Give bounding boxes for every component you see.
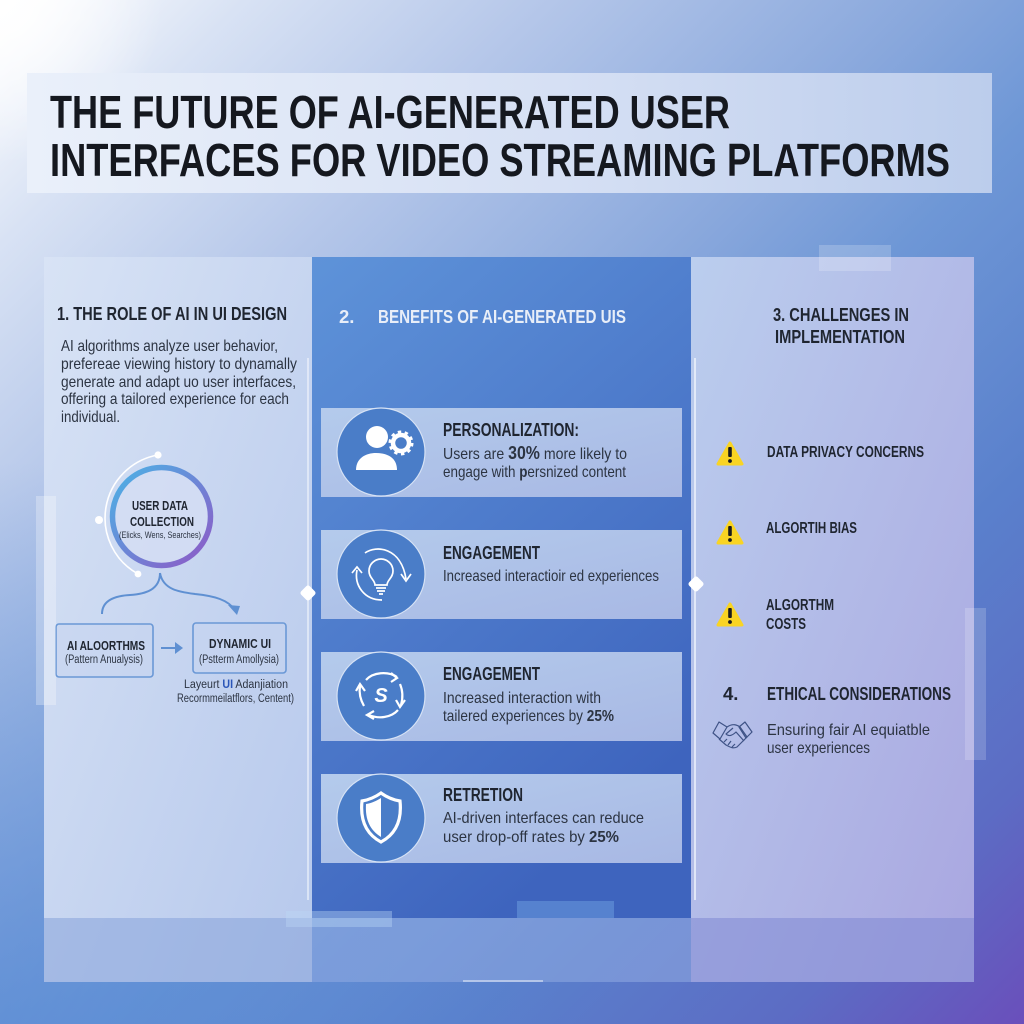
panel: challenges in implementation	[691, 257, 974, 982]
heading: section 2: BENEFITS OF AI-GENERATED UIS	[378, 306, 626, 327]
icon: handshake	[713, 722, 752, 748]
card: personalization: Users are 30% more likely to	[443, 443, 627, 463]
intro text: prefereae viewing history to dynamally	[61, 356, 297, 373]
caption: Recormmeilatflors, Centent)	[177, 693, 294, 705]
node: user data collection: COLLECTION	[130, 514, 194, 529]
heading: section 3: IMPLEMENTATION	[775, 327, 905, 347]
icon: light bulb with arrows	[352, 549, 411, 600]
item: data privacy: DATA PRIVACY CONCERNS	[767, 444, 924, 461]
heading: section 4: ETHICAL CONSIDERATIONS	[767, 683, 951, 704]
item: algorithm bias: ALGORTIH BIAS	[766, 520, 857, 537]
intro text: offering a tailored experience for each	[61, 391, 289, 408]
card: engagement 2: tailered experiences by 25%	[443, 708, 614, 725]
caption	[177, 679, 294, 705]
node: AI algorithms: (Pattern Anualysis)	[65, 654, 143, 666]
item: algorithm costs: COSTS	[766, 616, 806, 633]
card: engagement 1: Increased interactioir ed experiences	[443, 568, 659, 585]
item: algorithm bias	[718, 520, 857, 543]
card: retention: AI-driven interfaces can reduce	[443, 810, 644, 827]
node: dynamic UI	[193, 623, 286, 673]
heading: section 4	[723, 683, 951, 704]
item: data privacy	[718, 443, 924, 464]
node: dynamic UI: (Pstterm Amollysia)	[199, 654, 279, 666]
title	[50, 86, 950, 186]
panel: the role of AI in UI design	[44, 257, 312, 982]
text: ethical considerations	[767, 722, 930, 757]
node: user data collection: USER DATA	[132, 498, 188, 513]
text: ethical considerations: Ensuring fair AI equiatble	[767, 722, 930, 739]
card: engagement 1: ENGAGEMENT	[443, 543, 540, 563]
panel: benefits of AI-generated UIs	[312, 257, 691, 918]
node: user data collection: (Elicks, Wens, Searches)	[119, 530, 201, 541]
icon: shield	[362, 793, 400, 842]
heading: section 4: 4.	[723, 683, 738, 704]
card: retention: RETRETION	[443, 785, 523, 805]
card: engagement 1	[321, 530, 682, 619]
heading: section 2: 2.	[339, 306, 354, 327]
node: AI algorithms	[56, 624, 153, 677]
icon: user with gear	[356, 426, 412, 470]
card: personalization: engage with persnized content	[443, 464, 626, 481]
icon: cycle with dollar	[356, 673, 405, 719]
title banner	[27, 73, 992, 193]
intro text: generate and adapt uo user interfaces,	[61, 374, 296, 391]
card: personalization: PERSONALIZATION:	[443, 420, 579, 440]
bottom translucent band	[44, 918, 974, 982]
heading: section 3	[773, 305, 909, 347]
title: THE FUTURE OF AI-GENERATED USER	[50, 86, 730, 138]
card: retention	[321, 774, 682, 863]
decorative translucent chips	[36, 245, 986, 982]
node: AI algorithms: AI ALOORTHMS	[67, 638, 145, 653]
divider nodes	[303, 358, 701, 900]
node: dynamic UI: DYNAMIC UI	[209, 636, 271, 651]
card: personalization	[321, 408, 682, 497]
text: ethical considerations: user experiences	[767, 740, 870, 757]
card: engagement 2: Increased interaction with	[443, 690, 601, 707]
item: algorithm costs	[718, 597, 834, 633]
item: algorithm costs: ALGORTHM	[766, 597, 834, 614]
heading: section 1: 1. THE ROLE OF AI IN UI DESIGN	[57, 304, 287, 324]
connector arrows	[102, 573, 240, 654]
card: engagement 2: ENGAGEMENT	[443, 664, 540, 684]
flow diagram	[56, 451, 294, 705]
intro text: AI algorithms analyze user behavior,	[61, 338, 278, 355]
card: retention: user drop-off rates by 25%	[443, 829, 619, 846]
card: engagement 2	[321, 652, 682, 741]
orbit arc	[95, 451, 162, 577]
heading: section 3: 3. CHALLENGES IN	[773, 305, 909, 325]
caption: Layeurt UI Adanjiation	[184, 679, 288, 691]
intro text	[61, 338, 297, 426]
node: user data collection	[112, 468, 210, 566]
icon: cycle with dollar: S	[374, 685, 388, 707]
intro text: individual.	[61, 409, 120, 426]
